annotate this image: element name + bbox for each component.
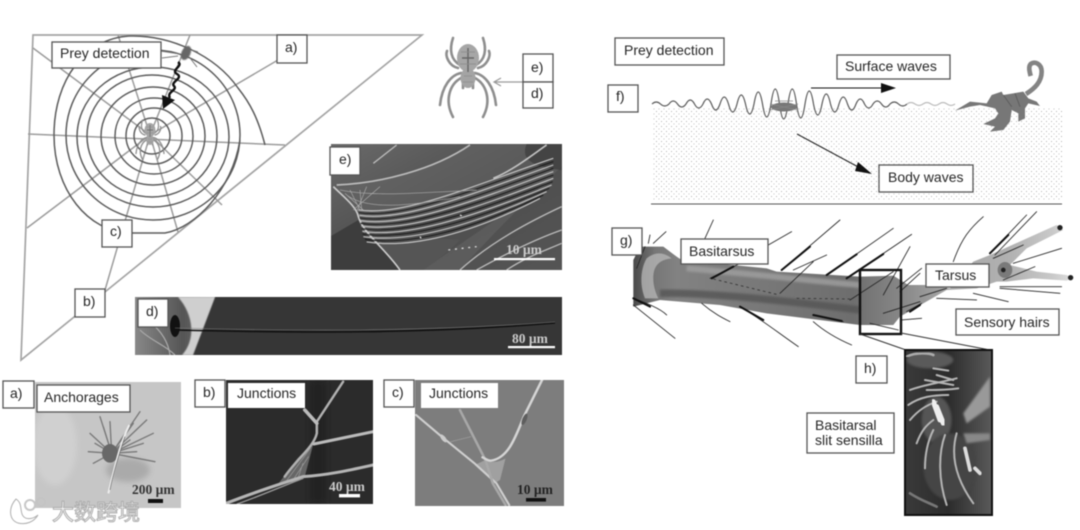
label b) photo	[195, 380, 225, 407]
arrow: surface waves	[811, 83, 896, 93]
icon: prey insect	[160, 44, 198, 67]
label g): g)	[620, 232, 632, 248]
photo d: trichobothrium hair	[135, 297, 562, 355]
heading: Prey detection	[615, 38, 724, 65]
icon: scorpion	[955, 63, 1042, 132]
scale bar b: 40 µm: 40 µm	[329, 479, 366, 494]
label c) web	[102, 220, 132, 247]
label f)	[608, 85, 638, 112]
sensory hairs	[633, 212, 1062, 347]
label Anchorages: Anchorages	[44, 389, 119, 405]
arrow: spider to labels	[494, 78, 523, 86]
label: Prey detection (web)	[52, 42, 161, 68]
heading: Prey detection: Prey detection	[624, 42, 714, 58]
label d) photo: d)	[146, 303, 158, 319]
label e) photo: e)	[339, 151, 351, 167]
label b) photo: b)	[203, 384, 215, 400]
label f): f)	[616, 88, 625, 104]
photo h frame	[905, 350, 992, 515]
label Basitarsus	[681, 239, 768, 264]
label Basitarsal slit sensilla: Basitarsal	[815, 417, 876, 433]
label d) spider	[523, 82, 553, 108]
icon: cockroach prey	[770, 101, 798, 112]
label c) photo	[384, 380, 414, 407]
label Junctions b	[228, 383, 305, 408]
label Sensory hairs: Sensory hairs	[964, 314, 1050, 330]
label Anchorages	[37, 385, 130, 412]
scale bar e: 10 µm	[494, 242, 555, 260]
label g)	[612, 228, 642, 255]
label h)	[856, 356, 887, 383]
scale bar e: 10 µm: 10 µm	[506, 242, 543, 257]
label Sensory hairs	[956, 309, 1059, 335]
leg segment body	[633, 225, 1073, 325]
photo a: anchorage	[33, 382, 181, 508]
sand dotted ground	[653, 108, 1063, 200]
surface wave	[652, 89, 907, 119]
label h): h)	[864, 360, 876, 376]
label Body waves	[879, 165, 973, 192]
web diagram	[21, 35, 422, 360]
slit sensilla dashes	[713, 279, 850, 299]
label Junctions b: Junctions	[237, 385, 296, 401]
label Basitarsus: Basitarsus	[689, 243, 754, 259]
photo b: junction	[226, 380, 373, 504]
arrow: body waves	[797, 134, 872, 174]
label c) web: c)	[110, 223, 122, 239]
label a) photo: a)	[10, 385, 22, 401]
label c) photo: c)	[392, 384, 404, 400]
label Surface waves: Surface waves	[845, 58, 937, 74]
label Tarsus	[926, 264, 989, 287]
label Basitarsal slit sensilla: slit sensilla	[815, 432, 883, 448]
label Body waves: Body waves	[888, 169, 963, 185]
photo c: junction	[415, 380, 564, 506]
icon: spider body	[440, 38, 496, 117]
label Tarsus: Tarsus	[935, 267, 976, 283]
photo h: slit sensilla close-up	[905, 350, 992, 515]
arrow: vibration signal	[162, 62, 180, 109]
watermark logo and text: 大数跨境	[52, 500, 140, 525]
zoom rectangle on leg	[860, 270, 901, 334]
scale bar d: 80 µm: 80 µm	[512, 331, 549, 346]
label b) web: b)	[83, 293, 95, 309]
label e) photo	[330, 147, 360, 175]
watermark logo and text	[11, 498, 140, 525]
label e) spider: e)	[531, 59, 543, 75]
zoom connector lines	[860, 333, 990, 350]
label a) web	[277, 35, 307, 63]
label Basitarsal slit sensilla	[807, 413, 894, 453]
label d) photo	[138, 299, 168, 327]
scale bar d: 80 µm	[508, 331, 555, 348]
web spiral	[54, 36, 265, 233]
label a) web: a)	[285, 39, 297, 55]
scale bar a: 200 µm: 200 µm	[132, 482, 175, 497]
web frame	[21, 35, 422, 360]
label b) web	[75, 289, 105, 317]
label e) spider	[523, 54, 553, 82]
label Junctions c	[421, 383, 498, 408]
label a) photo	[3, 381, 34, 408]
web radial threads	[27, 35, 285, 290]
label: Prey detection (web): Prey detection	[60, 45, 150, 61]
photo e: lyriform organ	[330, 144, 562, 270]
leg shading	[660, 293, 860, 310]
ground base line	[651, 203, 1062, 205]
fading wave end	[907, 102, 955, 106]
label Junctions c: Junctions	[429, 385, 488, 401]
label Surface waves	[837, 55, 950, 79]
icon: spider at web centre	[136, 120, 164, 160]
thick hair bases	[633, 235, 1008, 321]
panel f: sand with waves	[651, 63, 1063, 204]
scale bar c: 10 µm: 10 µm	[517, 482, 554, 497]
label d) spider: d)	[531, 85, 543, 101]
panel g: spider leg	[633, 212, 1073, 347]
